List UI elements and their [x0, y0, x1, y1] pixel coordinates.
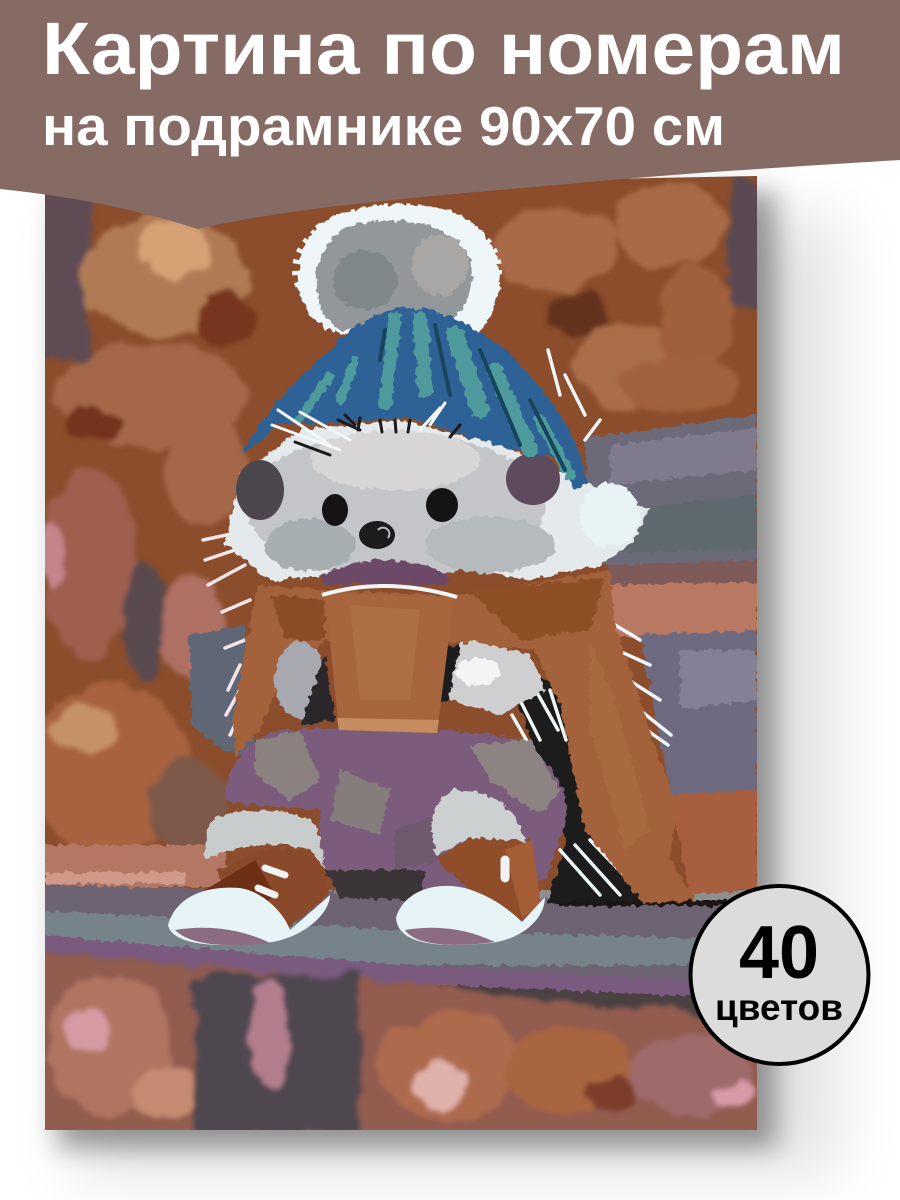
left boot [168, 810, 330, 945]
ears [236, 453, 560, 520]
lower bench and foliage [30, 950, 770, 1140]
seat band above plank [45, 845, 225, 887]
knitted hat [243, 307, 587, 490]
hedgehog [168, 204, 695, 945]
painting background wall [28, 170, 765, 890]
paper cup [322, 586, 457, 733]
painting: hedgehog on a bench [28, 170, 770, 1140]
badge label: цветов [715, 987, 843, 1028]
right bench slats [189, 415, 757, 895]
right side spikes [512, 350, 671, 895]
eyes and nose [322, 488, 458, 549]
paws [275, 640, 545, 725]
seat plank [45, 882, 728, 1020]
subtitle: на подрамнике 90х70 см [42, 95, 725, 157]
top banner [0, 0, 900, 229]
face [225, 420, 650, 585]
scarf [232, 570, 695, 905]
badge number: 40 [739, 910, 819, 994]
badge: 40 colours [690, 886, 868, 1064]
forehead spikes [272, 403, 445, 450]
title: Картина по номерам [42, 7, 845, 90]
trousers [225, 728, 568, 900]
hat pom-pom [297, 204, 499, 335]
canvas drop shadow [58, 192, 840, 1175]
back quills [516, 678, 640, 904]
left side spikes [203, 530, 250, 735]
right boot [396, 790, 545, 945]
